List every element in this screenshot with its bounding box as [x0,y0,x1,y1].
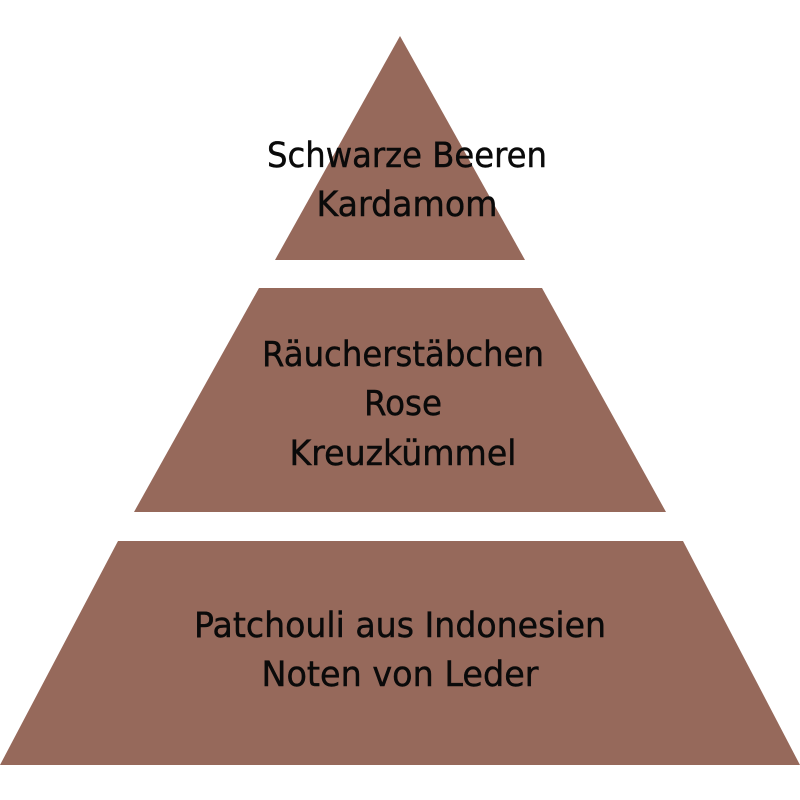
pyramid tier: top [267,36,547,260]
bottom tier label: Patchouli aus Indonesien [194,606,606,646]
middle tier label third line: Kreuzkümmel [290,434,516,474]
pyramid tier: bottom [0,541,800,765]
middle tier label: Räucherstäbchen [262,335,544,375]
bottom tier label second line: Noten von Leder [262,655,539,695]
top tier label second line: Kardamom [316,185,498,225]
pyramid tier: middle [134,288,666,512]
top tier label: Schwarze Beeren [267,136,547,176]
middle tier label second line: Rose [364,384,442,424]
